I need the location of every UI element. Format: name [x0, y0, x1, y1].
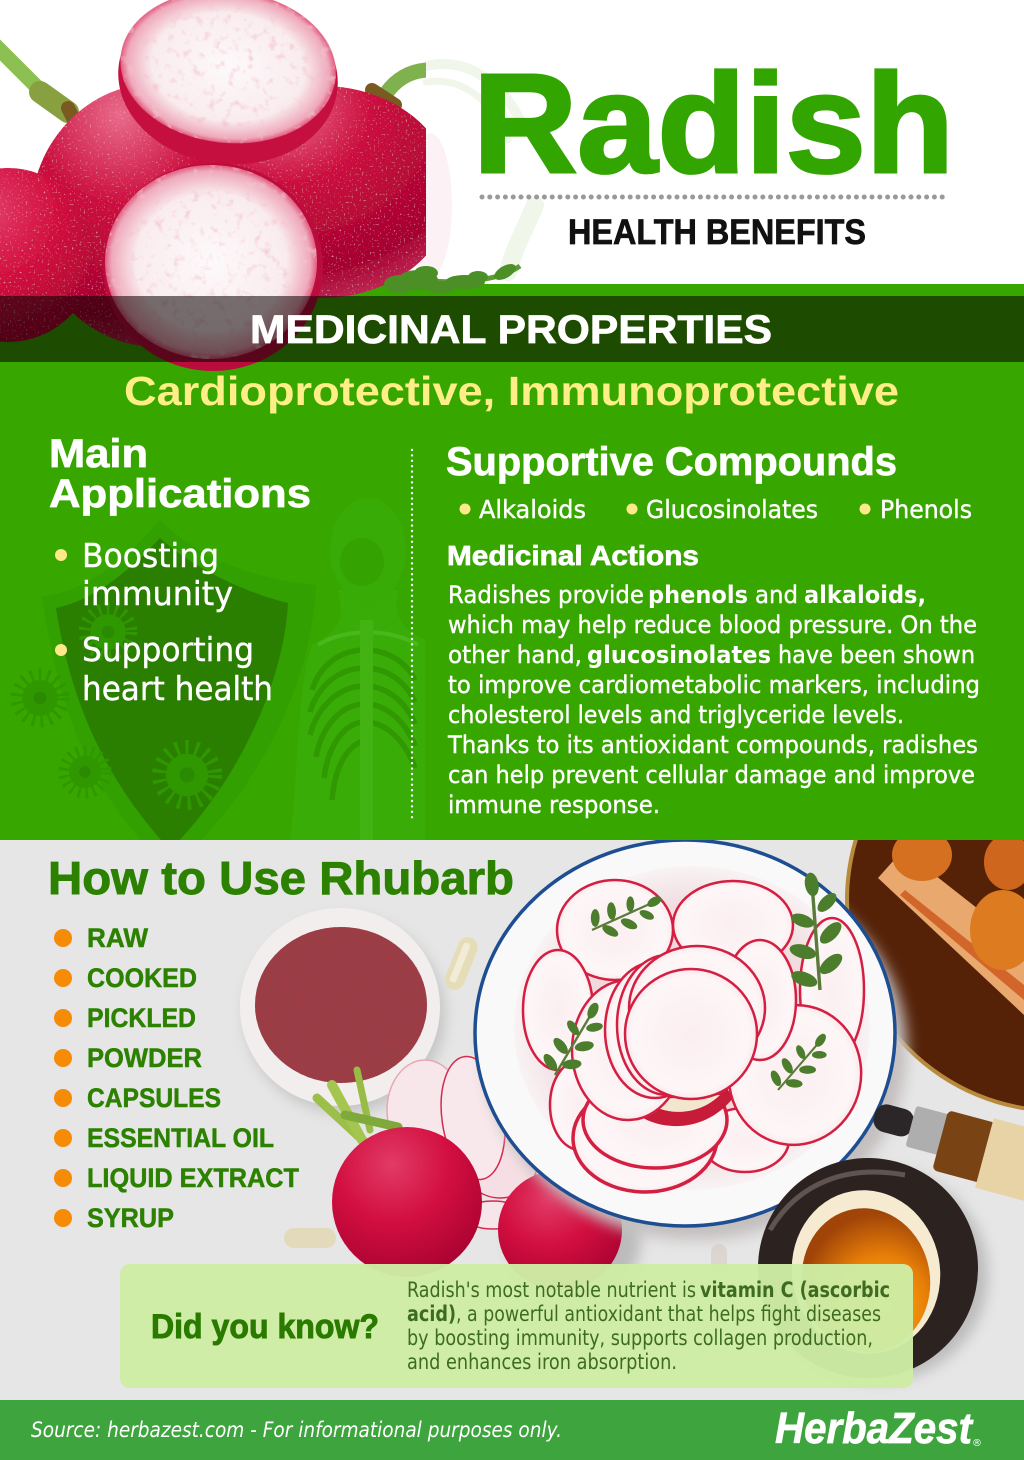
- loose radish slices: [387, 1052, 538, 1229]
- paragraph: medicinal actions: phenols: [648, 581, 748, 609]
- panel: main applications: [49, 432, 311, 708]
- dish of cooked radish: [845, 840, 1024, 1110]
- paragraph: medicinal actions: cholesterol levels and triglyceride levels.: [448, 701, 904, 729]
- paragraph: medicinal actions: [447, 581, 980, 819]
- band: medicinal properties: [0, 296, 1024, 362]
- source line: Source: herbazest.com - For informational purposes only.: [31, 1418, 562, 1442]
- item: powder: POWDER: [87, 1043, 202, 1073]
- stems of whole radish: [317, 1070, 398, 1145]
- parsley leaves: [384, 261, 520, 293]
- panel: supportive compounds: [446, 440, 980, 819]
- item: liquid extract: LIQUID EXTRACT: [87, 1163, 299, 1193]
- callout text: [407, 1278, 890, 1374]
- logo: herbazest: ®: [972, 1438, 982, 1449]
- green section background: [0, 284, 1024, 840]
- whole radish right: [498, 1174, 622, 1264]
- callout text: , a powerful antioxidant that helps fight diseases: [456, 1302, 881, 1326]
- bullet: supporting heart health: [55, 630, 273, 708]
- slices back: [557, 880, 673, 980]
- bowl shadow: [483, 860, 907, 1240]
- list: ways to use: [54, 923, 299, 1233]
- callout text: Radish's most notable nutrient is: [407, 1278, 696, 1302]
- whole radish back left: [38, 89, 198, 346]
- photo: pile of radishes: [0, 0, 452, 371]
- callout text: vitamin C (ascorbic: [700, 1278, 890, 1302]
- footer: [0, 1400, 1024, 1460]
- paragraph: medicinal actions: alkaloids,: [804, 581, 926, 609]
- whole radish back right: [233, 86, 426, 298]
- whole radish far left: [0, 168, 95, 342]
- sliced radish top: [118, 0, 338, 164]
- radish right shadow: [508, 1222, 646, 1264]
- callout: did you know: [120, 1264, 913, 1388]
- stems: [0, 45, 430, 120]
- paragraph: medicinal actions: have been shown: [778, 641, 975, 669]
- capsule bottom: [284, 1228, 336, 1248]
- item: cooked: COOKED: [87, 963, 197, 993]
- heading: how to use: How to Use Rhubarb: [48, 852, 514, 904]
- dark bowl with honey: [758, 1158, 978, 1378]
- bullet: supporting heart health: Supporting: [82, 630, 254, 669]
- skeleton figure: [308, 620, 419, 840]
- item: capsules: CAPSULES: [87, 1083, 221, 1113]
- bullet: boosting immunity: immunity: [82, 574, 233, 613]
- item: raw: RAW: [87, 923, 148, 953]
- callout text: acid): [407, 1302, 456, 1326]
- radish powder: [255, 927, 427, 1083]
- paragraph: medicinal actions: to improve cardiometabolic markers, including: [448, 671, 980, 699]
- faint radish leaf watermark behind title: [408, 64, 535, 277]
- title: Radish: [473, 44, 954, 202]
- white bowl with slices: [475, 840, 895, 1226]
- capsule top: [444, 937, 478, 990]
- bullet: supporting heart health: heart health: [82, 669, 273, 708]
- page background: white header: [0, 0, 1024, 284]
- item: raw: [54, 923, 148, 953]
- heading: main applications: Main: [49, 432, 148, 476]
- compound list: Glucosinolates: [646, 495, 818, 524]
- paragraph: medicinal actions: other hand,: [448, 641, 582, 669]
- item: essential oil: ESSENTIAL OIL: [87, 1123, 274, 1153]
- paragraph: medicinal actions: can help prevent cellular damage and improve: [448, 761, 975, 789]
- sliced radish bottom: [103, 163, 323, 371]
- bullet: boosting immunity: Boosting: [82, 536, 219, 575]
- item: syrup: [54, 1203, 174, 1233]
- shield: [56, 538, 288, 840]
- paragraph: medicinal actions: immune response.: [448, 791, 660, 819]
- heading: medicinal properties: MEDICINAL PROPERTIES: [250, 308, 772, 352]
- dark bowl shadow: [912, 1170, 994, 1382]
- photo: food flat lay: [240, 687, 1024, 1381]
- powder plate shadow: [245, 917, 445, 1113]
- title: HEALTH BENEFITS: [568, 213, 866, 252]
- callout text: and enhances iron absorption.: [407, 1350, 677, 1374]
- heading: supportive compounds: Supportive Compounds: [446, 440, 897, 484]
- callout text: by boosting immunity, supports collagen production,: [407, 1326, 873, 1350]
- subtitle: cardioprotective, immunoprotective: Cardioprotective, Immunoprotective: [124, 368, 899, 414]
- paragraph: medicinal actions: glucosinolates: [587, 641, 771, 669]
- compound list: Phenols: [880, 495, 972, 524]
- heading: medicinal actions: Medicinal Actions: [447, 540, 699, 571]
- paragraph: medicinal actions: and: [755, 581, 798, 609]
- bullet: boosting immunity: [55, 536, 233, 613]
- callout heading: Did you know?: [151, 1308, 379, 1346]
- item: pickled: PICKLED: [87, 1003, 196, 1033]
- section background: how to use: [0, 840, 1024, 1400]
- capsule faint: [711, 1244, 727, 1264]
- logo: herbazest: HerbaZest: [775, 1404, 974, 1453]
- heading: main applications: [49, 432, 311, 516]
- whole radish left: [332, 1127, 482, 1277]
- heading: main applications: Applications: [49, 472, 311, 516]
- item: syrup: SYRUP: [87, 1203, 174, 1233]
- paragraph: medicinal actions: Radishes provide: [448, 581, 644, 609]
- compound list: Alkaloids: [479, 495, 586, 524]
- paragraph: medicinal actions: which may help reduce blood pressure. On the: [448, 611, 977, 639]
- powder plate: [240, 908, 440, 1106]
- illustration: shield with viruses and skeleton watermark: [10, 538, 419, 840]
- thyme sprigs: [544, 872, 842, 1091]
- dropper bottle: [874, 1104, 1024, 1201]
- compound list: [460, 495, 972, 524]
- virus particles: [18, 610, 213, 801]
- paragraph: medicinal actions: Thanks to its antioxidant compounds, radishes: [447, 731, 978, 759]
